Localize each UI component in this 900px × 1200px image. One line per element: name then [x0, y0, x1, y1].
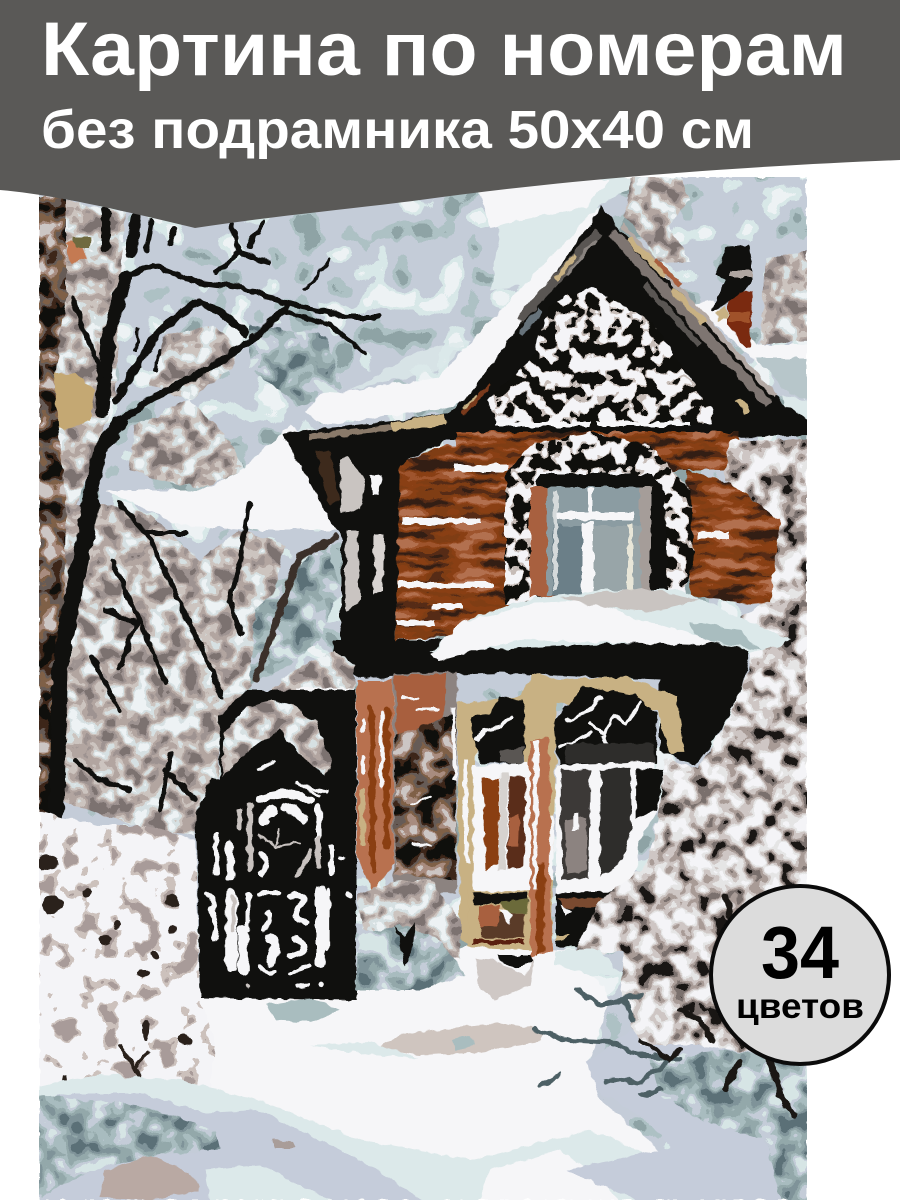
left window panes — [473, 762, 533, 890]
left background foliage — [39, 195, 345, 835]
right roof boards — [612, 225, 775, 412]
dark specks in left bush — [39, 854, 192, 1080]
porch pillars and wall — [357, 673, 457, 893]
snow covered bush bottom left — [39, 812, 215, 1105]
right arch black — [553, 687, 657, 765]
window lace surround — [505, 432, 695, 605]
beige porch frame — [457, 673, 685, 947]
badge number: 34 — [761, 911, 839, 994]
left lower snow roof — [272, 651, 356, 692]
center pillar — [530, 737, 552, 958]
brick top of wall behind pillar — [393, 673, 457, 893]
gate snow cap — [222, 700, 332, 777]
snow ground — [200, 945, 658, 1160]
header banner — [0, 0, 900, 228]
lower house dark mass — [333, 640, 750, 765]
left brown pillar — [357, 680, 393, 893]
gate white ironwork — [208, 761, 350, 987]
upper window — [530, 474, 668, 605]
bright sky glow — [478, 177, 631, 290]
right lower panel — [556, 892, 637, 947]
background trees top right — [625, 177, 807, 345]
dark branches bottom right — [640, 895, 795, 1115]
porch windows — [403, 673, 685, 958]
far left dark trunks — [39, 196, 66, 835]
left lower panel — [468, 890, 533, 950]
tree branches — [56, 210, 378, 815]
black gate — [196, 690, 356, 1000]
sill snow — [473, 870, 530, 892]
badge caption: цветов — [736, 987, 864, 1026]
chimney — [693, 245, 807, 420]
mottled porch wall — [395, 715, 456, 880]
title line 1: Картина по номерам — [41, 7, 847, 92]
snow on left roof slope — [306, 208, 600, 425]
swirl on porch wall — [403, 698, 437, 847]
left arch black — [473, 697, 524, 763]
title line 2: без подрамника 50x40 см — [41, 100, 754, 160]
bare teal shrub branches bottom right — [535, 990, 680, 1095]
winter sky background — [39, 177, 807, 1200]
badge: 34 colours — [711, 886, 889, 1064]
main roof and gable — [283, 206, 807, 440]
gable lace ornament — [487, 287, 714, 427]
snow at porch steps — [475, 950, 620, 1000]
right wall foliage — [725, 440, 807, 660]
left roof boards — [462, 232, 598, 415]
painting: snowy wooden house — [38, 177, 808, 1200]
right window panes — [556, 762, 660, 893]
porch snow roof — [430, 588, 790, 660]
taupe shadow streak on path — [310, 1023, 545, 1058]
shadowed snow bottom left — [39, 1075, 660, 1200]
gate base shadow — [265, 998, 340, 1022]
log wall with lit boards — [395, 432, 792, 640]
porch snow mound bush — [355, 880, 465, 990]
shadowed snow bottom right — [567, 1030, 808, 1200]
left eave and bracket — [283, 415, 452, 640]
foliage right of windows — [570, 640, 807, 1060]
